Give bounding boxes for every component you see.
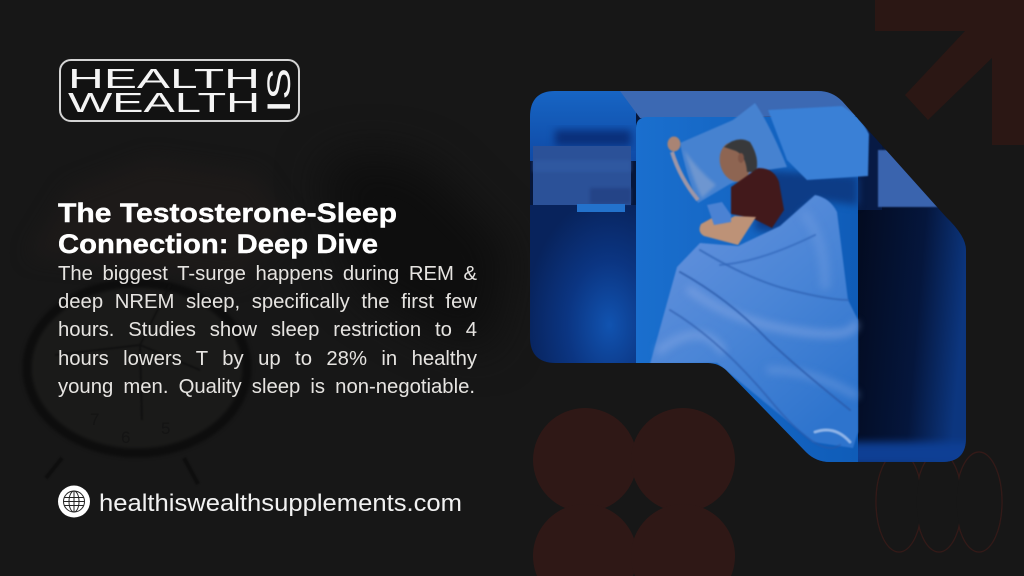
title: Connection: Deep Dive <box>58 229 378 259</box>
shadow beneath pillows <box>755 170 858 232</box>
t-shirt <box>731 168 784 228</box>
folded arm <box>700 216 756 245</box>
body text: hours lowers T by up to 28% in healthy <box>58 348 477 370</box>
headboard strip <box>620 91 862 118</box>
blurred dark sleeve <box>320 155 510 350</box>
floor and wall <box>530 91 970 466</box>
fist <box>668 136 680 152</box>
body text: deep NREM sleep, specifically the first few <box>58 291 477 313</box>
right pillow <box>768 106 869 180</box>
duvet folds <box>660 215 855 395</box>
body text: young men. Quality sleep is non-negotiable. <box>58 376 475 398</box>
photo: man sleeping on blue bed <box>530 91 966 462</box>
body text: The biggest T-surge happens during REM & <box>58 262 477 284</box>
website url: healthiswealthsupplements.com <box>99 490 462 517</box>
alarm clock: 6 <box>121 428 130 447</box>
left pillow <box>680 103 787 203</box>
logo frame <box>60 60 299 121</box>
logo wordmark: HEALTH <box>68 63 260 94</box>
decorative four circles <box>533 408 735 576</box>
title <box>58 198 397 259</box>
arrow shape: male symbol <box>875 0 1024 145</box>
logo wordmark: IS <box>261 68 297 113</box>
alarm clock <box>27 283 247 484</box>
title: The Testosterone-Sleep <box>58 198 397 228</box>
bunched duvet at chest <box>707 202 731 225</box>
logo wordmark <box>68 63 297 118</box>
body text <box>58 262 478 398</box>
decorative outlined ellipses <box>876 452 1002 552</box>
mattress <box>636 117 858 466</box>
man <box>668 136 784 245</box>
alarm clock: 5 <box>161 419 170 438</box>
body text: hours. Studies show sleep restriction to 4 <box>58 319 477 341</box>
alarm clock: 7 <box>90 410 99 429</box>
duvet <box>650 195 858 448</box>
left nightstand <box>533 130 631 212</box>
icon: globe <box>58 486 90 518</box>
logo wordmark: WEALTH <box>68 87 260 118</box>
blurred hand <box>30 160 290 280</box>
head <box>718 142 750 183</box>
raised arm <box>672 152 698 200</box>
right nightstand <box>858 120 938 210</box>
